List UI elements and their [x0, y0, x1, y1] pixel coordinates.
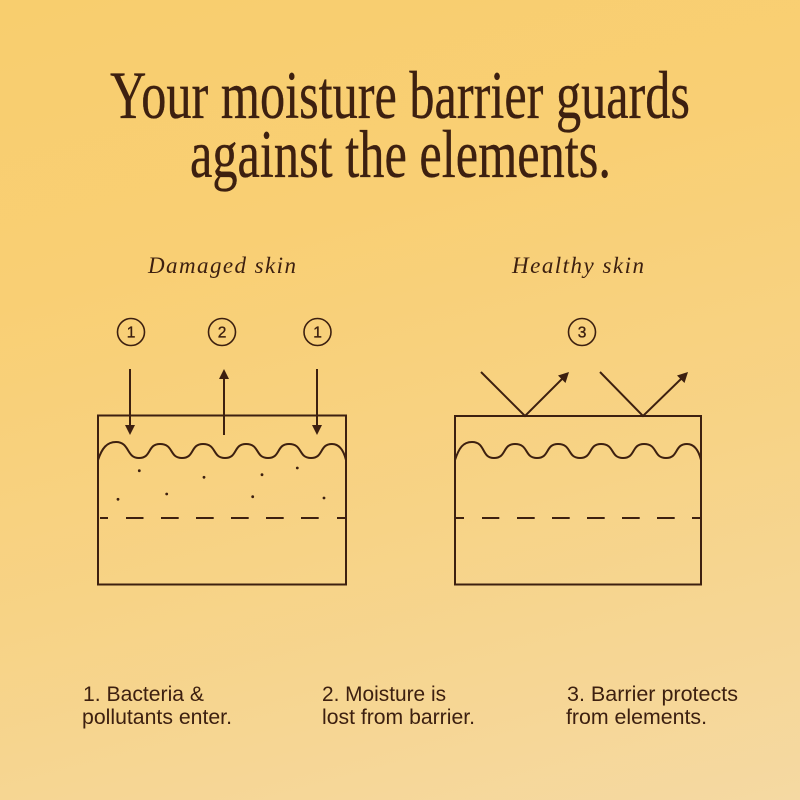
caption 1: 1. Bacteria &	[83, 683, 204, 706]
arrow: deflected element left	[481, 372, 569, 416]
badge: 3: 3	[578, 324, 586, 342]
arrow: bacteria entering left	[125, 369, 135, 435]
badge: 2	[208, 318, 236, 346]
badge: 3	[568, 318, 596, 346]
wavy skin surface	[455, 442, 701, 460]
badge: 1 left	[118, 318, 144, 346]
caption 3	[566, 683, 738, 729]
arrow: bacteria entering right	[312, 369, 322, 435]
caption 3: from elements.	[566, 706, 707, 729]
caption 2: 2. Moisture is	[322, 683, 446, 706]
caption 1	[82, 683, 232, 729]
caption 1: pollutants enter.	[82, 706, 232, 729]
barrier dashed line	[455, 517, 701, 519]
skin cross-section box	[98, 416, 346, 584]
badge: 2: 2	[218, 324, 226, 342]
badge: 1 right	[304, 318, 331, 346]
pollutant particles	[117, 467, 325, 501]
caption 2: lost from barrier.	[322, 706, 475, 729]
skin cross-section box	[455, 416, 701, 584]
wavy skin surface	[98, 442, 346, 460]
heading: healthy skin: Healthy skin	[511, 253, 644, 278]
caption 3: 3. Barrier protects	[567, 683, 738, 706]
arrow: deflected element right	[600, 372, 688, 416]
barrier dashed line	[100, 517, 346, 519]
panel: damaged skin diagram	[98, 318, 346, 584]
caption 2	[322, 683, 475, 729]
heading: damaged skin: Damaged skin	[147, 253, 296, 278]
arrow: moisture leaving	[219, 369, 229, 435]
title	[110, 57, 690, 192]
badge: 1 right: 1	[313, 324, 322, 342]
title: against the elements.	[190, 116, 611, 192]
badge: 1 left: 1	[127, 324, 135, 342]
panel: healthy skin diagram	[455, 318, 701, 584]
